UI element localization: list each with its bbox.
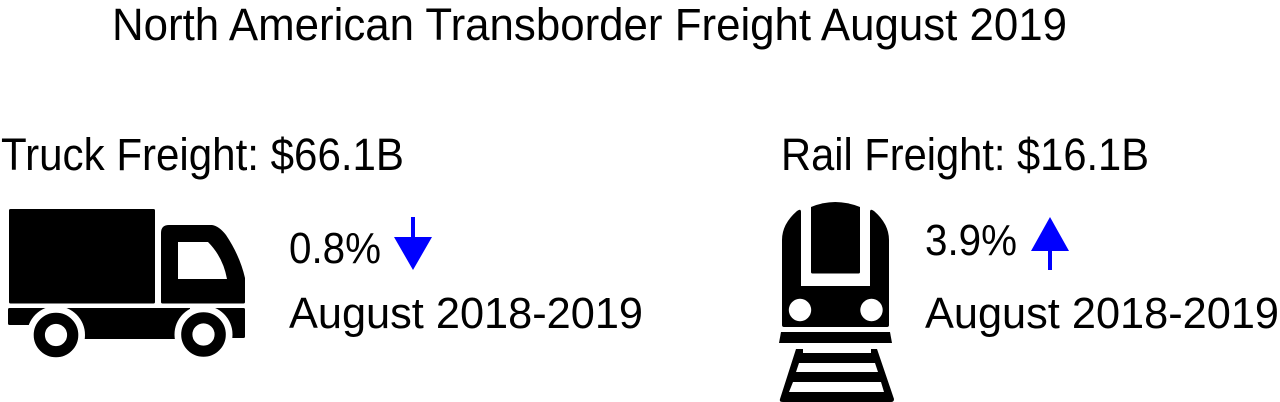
panel: rail freight [779, 129, 1279, 402]
arrow: down [394, 217, 432, 270]
stat: truck change: 0.8% [289, 224, 381, 273]
arrow: up [1031, 217, 1069, 270]
period: rail: August 2018-2019 [925, 289, 1279, 338]
icon: truck [8, 209, 245, 364]
stat: rail change: 3.9% [925, 216, 1017, 265]
icon: train [779, 202, 894, 402]
heading: rail freight: Rail Freight: $16.1B [781, 129, 1149, 180]
period: truck: August 2018-2019 [289, 289, 643, 338]
panel: truck freight [1, 129, 643, 364]
heading: truck freight: Truck Freight: $66.1B [1, 129, 404, 180]
title: North American Transborder Freight August 2019 [112, 0, 1067, 50]
